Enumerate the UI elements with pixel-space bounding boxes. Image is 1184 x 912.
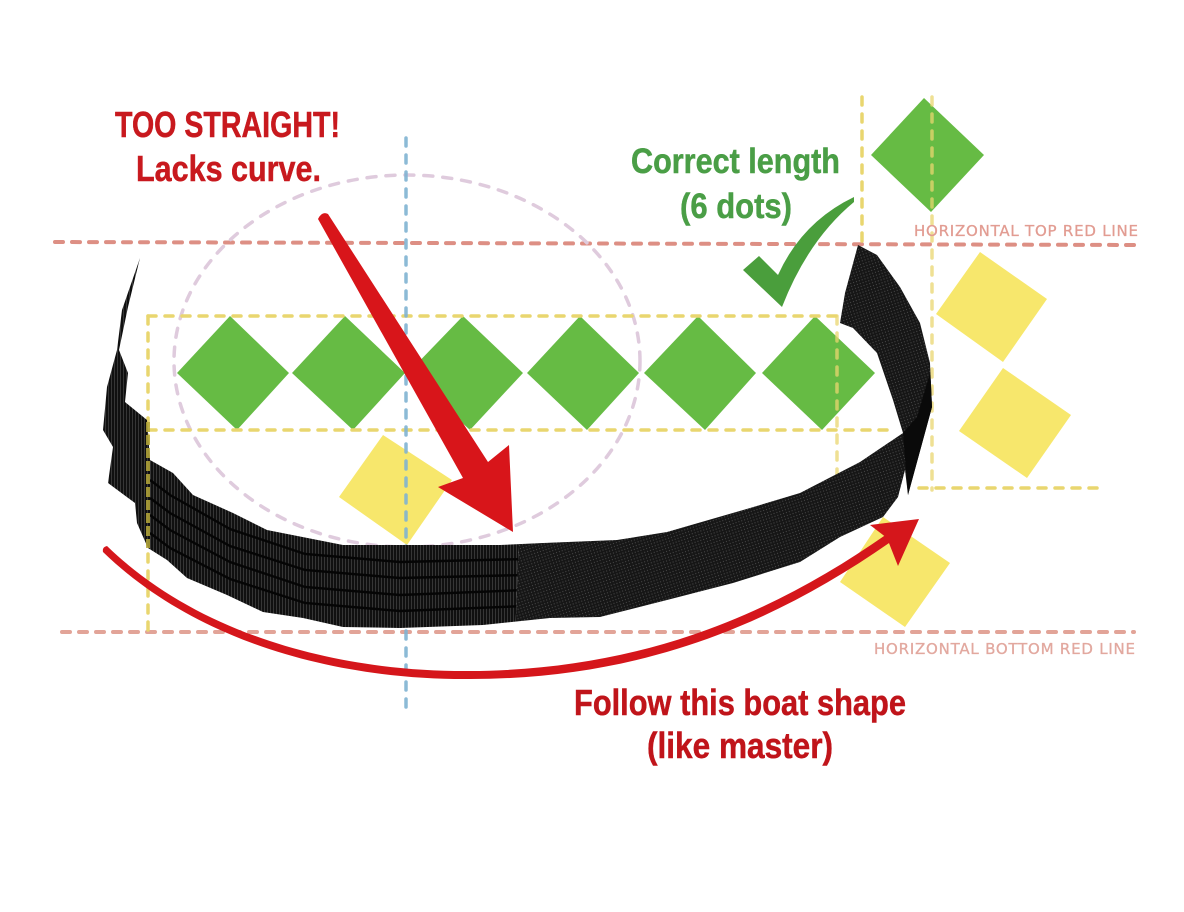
green diamonds row — [177, 316, 875, 430]
guide: horizontal bottom red line — [62, 630, 1134, 634]
guide: pink dashed ellipse — [174, 175, 640, 547]
green diamond top right — [871, 98, 984, 212]
black woven band — [95, 240, 950, 640]
callout: follow this boat shape: Follow this boat shape — [574, 682, 906, 723]
callout: too straight: TOO STRAIGHT! — [115, 104, 340, 145]
icon: green check mark — [743, 197, 854, 307]
callout: too straight — [115, 104, 340, 189]
guide: blue vertical center line — [404, 138, 408, 707]
callout: follow this boat shape — [574, 682, 906, 766]
callout: too straight: Lacks curve. — [136, 148, 321, 189]
callout: correct length — [631, 142, 840, 226]
arrow: straight red arrow — [318, 213, 513, 532]
guide: yellow dashed box and verticals — [148, 97, 1100, 632]
yellow guide overlapping band — [146, 422, 150, 548]
guide: horizontal top red line — [55, 242, 1138, 245]
callout: follow this boat shape: (like master) — [647, 725, 833, 766]
callout: correct length: (6 dots) — [680, 187, 792, 226]
label: horizontal top red line: HORIZONTAL TOP RED LINE — [914, 222, 1138, 240]
arrow: curved boat-shape arrow — [103, 519, 919, 679]
callout: correct length: Correct length — [631, 142, 840, 181]
yellow diamonds — [339, 252, 1071, 627]
label: horizontal bottom red line: HORIZONTAL BOTTOM RED LINE — [874, 640, 1135, 658]
infographic canvas — [53, 95, 1138, 766]
